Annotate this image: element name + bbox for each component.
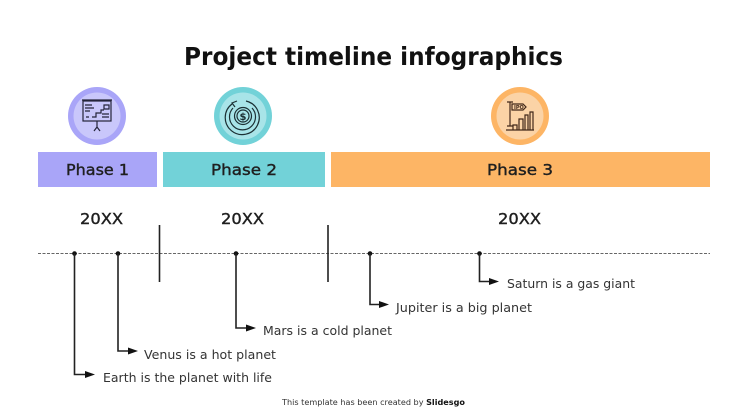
footer credit: This template has been created by Slidesgo <box>281 398 465 407</box>
milestone: Mars <box>234 251 392 338</box>
milestone: Venus: Venus is a hot planet <box>144 348 276 362</box>
milestone: Saturn <box>477 251 635 291</box>
year label phase 2: 20XX <box>221 210 264 228</box>
milestone: Venus <box>116 251 276 362</box>
phase divider 1 <box>158 225 160 282</box>
phase 2 bar <box>163 152 325 187</box>
phase 3 bar <box>331 152 710 187</box>
phase 1 bar <box>38 152 157 187</box>
phase 1 bar: Phase 1 <box>66 161 129 179</box>
icon: dollar cycle <box>214 87 272 145</box>
year label phase 3: 20XX <box>498 210 541 228</box>
milestone: Earth: Earth is the planet with life <box>103 371 272 385</box>
icon: dollar cycle: $ <box>240 112 247 123</box>
phase 2 bar: Phase 2 <box>211 161 277 179</box>
phase divider 2 <box>327 225 329 282</box>
milestone: Saturn: Saturn is a gas giant <box>507 277 635 291</box>
milestone: Jupiter <box>368 251 532 315</box>
year label phase 1: 20XX <box>80 210 123 228</box>
title: Project timeline infographics <box>184 42 563 71</box>
milestone: Jupiter: Jupiter is a big planet <box>395 301 532 315</box>
icon: IPO chart <box>491 87 549 145</box>
milestone: Earth <box>72 251 272 385</box>
phase 3 bar: Phase 3 <box>487 161 553 179</box>
icon: IPO chart: IPO <box>514 105 524 111</box>
icon: presentation board <box>68 87 126 145</box>
timeline axis <box>38 252 710 254</box>
milestone: Mars: Mars is a cold planet <box>263 324 392 338</box>
